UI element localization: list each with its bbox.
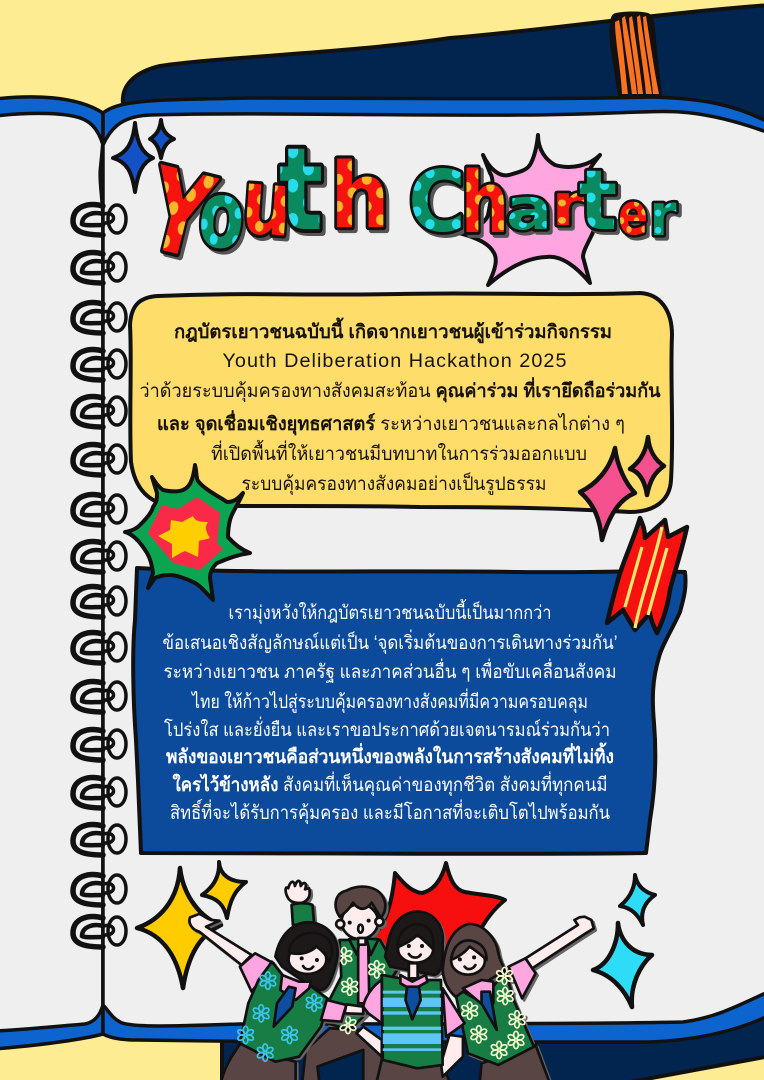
title: Youth Charter: a (506, 175, 552, 243)
intro text block: และ จุดเชื่อมเชิงยุทธศาสตร์ ระหว่างเยาวชนและกลไกต่าง ๆ (157, 410, 625, 436)
icon: cyan sparkle large (593, 923, 652, 1007)
icon: blue sparkle large (113, 123, 153, 192)
orange bookmark ribbon (610, 12, 662, 96)
left page with blue edge (0, 97, 103, 1049)
icon: cyan sparkle small (620, 875, 655, 925)
title: Youth Charter: o (194, 160, 249, 272)
title: Youth Charter: h (461, 155, 509, 253)
green starburst (125, 465, 250, 600)
statement text block: เรามุ่งหวังให้กฎบัตรเยาวชนฉบับนี้เป็นมากกว่า (228, 599, 552, 625)
title: Youth Charter: h (330, 143, 390, 249)
spine line (100, 113, 103, 1034)
title: Youth Charter: r (552, 171, 585, 239)
red burst behind students (372, 863, 505, 975)
pink starburst behind title (455, 135, 600, 285)
intro text block: ระบบคุ้มครองทางสังคมอย่างเป็นรูปธรรม (242, 471, 546, 496)
title: Youth Charter: C (408, 153, 466, 252)
title: Youth Charter (134, 124, 677, 286)
middle girl body (356, 975, 465, 1080)
statement text block: ข้อเสนอเชิงสัญลักษณ์แต่เป็น ‘จุดเริ่มต้นของการเดินทางร่วมกัน’ (162, 629, 618, 655)
boy student (286, 881, 397, 1080)
statement text block: ใครไว้ข้างหลัง สังคมที่เห็นคุณค่าของทุกชีวิต สังคมที่ทุกคนมี (172, 771, 608, 797)
red striped burst (607, 518, 687, 633)
icon: yellow sparkle small (202, 862, 246, 918)
middle girl head (385, 912, 443, 978)
title: Youth Charter: r (649, 183, 677, 249)
panel: yellow intro (130, 293, 672, 512)
right page with blue edge (103, 97, 764, 1042)
statement text block: ไทย ให้ก้าวไปสู่ระบบคุ้มครองทางสังคมที่มีความครอบคลุม (190, 688, 588, 714)
statement text block: สิทธิ์ที่จะได้รับการคุ้มครอง และมีโอกาสที่จะเติบโตไปพร้อมกัน (170, 798, 610, 825)
statement text block: โปร่งใส และยั่งยืน และเราขอประกาศด้วยเจตนารมณ์ร่วมกันว่า (164, 716, 610, 741)
intro text block: Youth Deliberation Hackathon 2025 (222, 351, 568, 372)
intro text block (140, 317, 660, 496)
panel: blue statement (133, 568, 686, 854)
icon: blue sparkle small (150, 120, 174, 158)
intro text block: ว่าด้วยระบบคุ้มครองทางสังคมสะท้อน คุณค่าร่วม ที่เรายึดถือร่วมกัน (140, 377, 660, 403)
title: Youth Charter: e (618, 181, 648, 249)
title: Youth Charter: u (239, 150, 296, 258)
icon: pink sparkle large (580, 448, 635, 540)
intro text block: กฎบัตรเยาวชนฉบับนี้ เกิดจากเยาวชนผู้เข้าร่วมกิจกรรม (174, 317, 612, 344)
students illustration (189, 881, 594, 1080)
title: Youth Charter: Y (134, 143, 225, 286)
statement text block: พลังของเยาวชนคือส่วนหนึ่งของพลังในการสร้างสังคมที่ไม่ทิ้ง (166, 742, 614, 768)
statement text block (162, 599, 618, 825)
icon: pink sparkle small (630, 437, 664, 495)
yellow panel shape (130, 293, 672, 512)
right girl student (443, 917, 594, 1080)
intro text block: ที่เปิดพื้นที่ให้เยาวชนมีบทบาทในการร่วมออกแบบ (211, 440, 587, 465)
title: Youth Charter: t (279, 124, 323, 257)
title: Youth Charter: t (579, 153, 617, 249)
icon: yellow sparkle large (137, 868, 221, 988)
blue panel shape (133, 568, 686, 854)
statement text block: ระหว่างเยาวชน ภาครัฐ และภาคส่วนอื่น ๆ เพื่อขับเคลื่อนสังคม (164, 658, 616, 683)
left girl student (189, 914, 363, 1080)
spiral binding rings (73, 205, 126, 947)
